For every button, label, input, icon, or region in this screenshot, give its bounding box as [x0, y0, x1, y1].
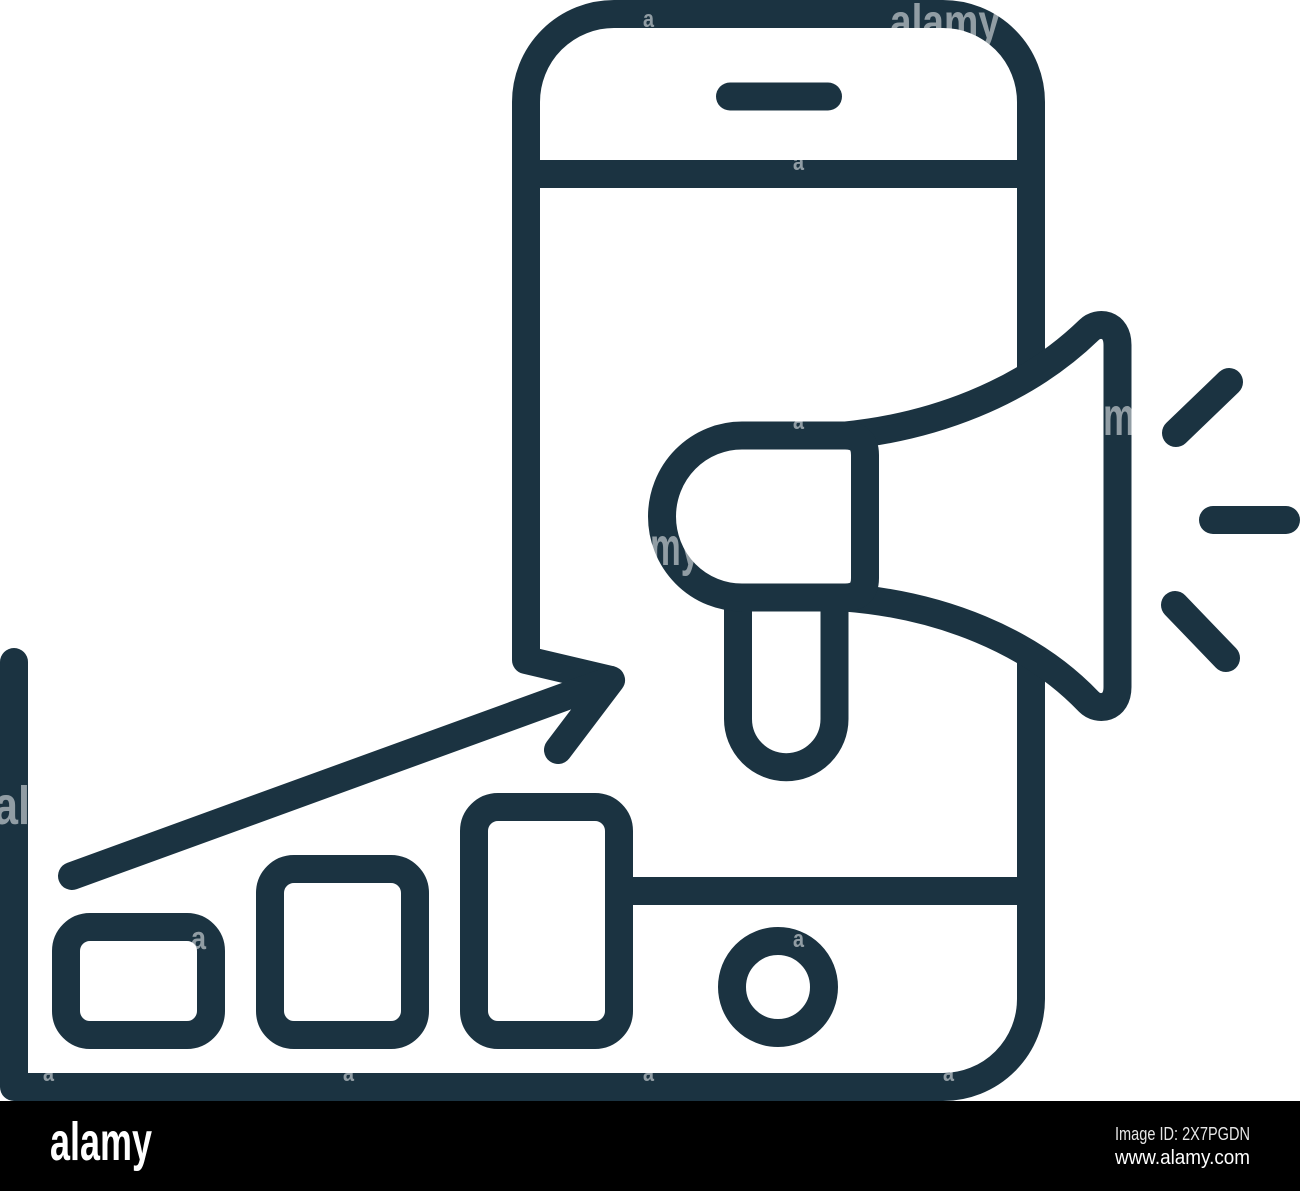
- bar chart: [66, 807, 619, 1035]
- watermark fragments: m: [1103, 387, 1135, 447]
- watermark fragments: a: [643, 1060, 655, 1087]
- watermark fragments: a: [43, 1060, 55, 1087]
- sound waves: [1175, 382, 1286, 658]
- watermark fragments: a: [943, 1060, 955, 1087]
- watermark fragments: my: [650, 517, 700, 577]
- phone speaker: [730, 82, 828, 110]
- watermark fragments: a: [793, 408, 805, 435]
- phone outline and chart axis: [14, 14, 1031, 1087]
- footer bar: [0, 1101, 1300, 1191]
- watermark fragments: a: [643, 6, 655, 33]
- watermark fragments: a: [793, 149, 805, 176]
- icon: megaphone: [662, 325, 1118, 767]
- growth arrow: [72, 680, 611, 876]
- phone bottom divider: [619, 877, 1031, 905]
- watermark fragments: a: [191, 920, 206, 956]
- image id: Image ID: 2X7PGDN: [1115, 1124, 1250, 1144]
- watermark fragments: a: [793, 926, 805, 953]
- phone top divider: [526, 160, 1031, 188]
- phone home button: [732, 941, 824, 1033]
- watermark fragments: [0, 0, 1135, 1087]
- website: www.alamy.com: [1114, 1147, 1250, 1169]
- footer logo: alamy: [50, 1112, 152, 1172]
- watermark fragments: a: [343, 1060, 355, 1087]
